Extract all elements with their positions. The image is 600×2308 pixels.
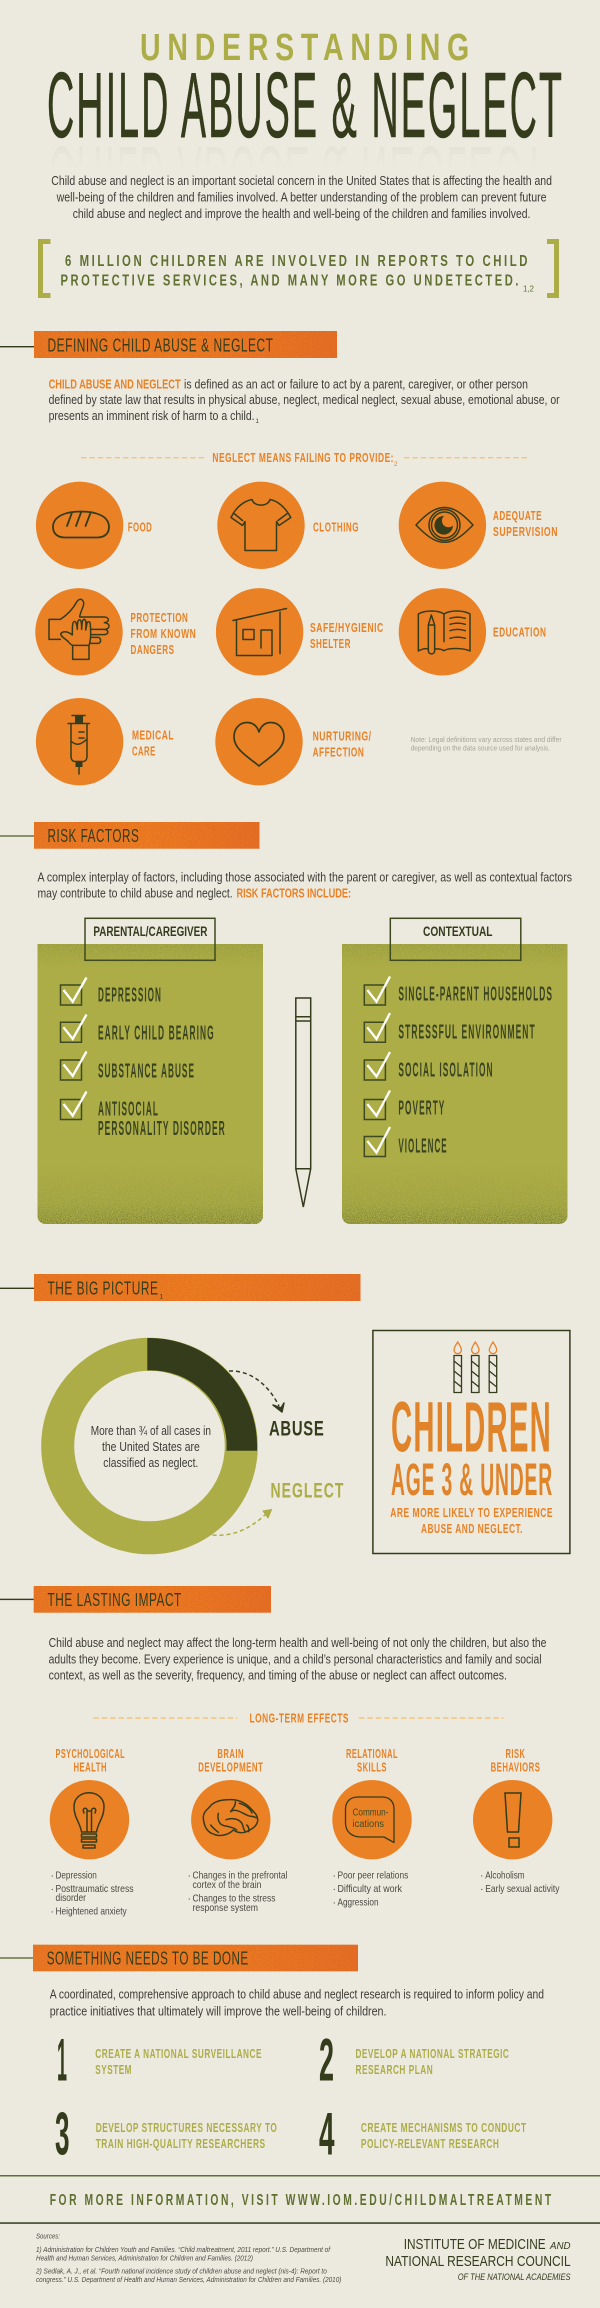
step 3: DEVELOP STRUCTURES NECESSARY TO [96,2120,277,2135]
step 1: 1 [57,2027,67,2094]
list: psychological: Posttraumatic stress [56,1883,134,1895]
column: brain development [188,1746,287,1914]
label: neglect: NEGLECT [270,1480,344,1503]
step 1: CREATE A NATIONAL SURVEILLANCE [95,2046,262,2061]
heading: long-term effects: LONG-TERM EFFECTS [250,1710,349,1725]
list: brain [188,1870,287,1914]
icon: light bulb [50,1780,129,1859]
list: brain: · [188,1870,191,1882]
list: psychological: · [50,1870,54,1882]
column: risk behaviors: RISK [506,1746,525,1761]
label: safe/hygienic shelter: SAFE/HYGIENIC [310,620,384,635]
section heading: risk factors [0,822,260,849]
donut center text: More than ¾ of all cases in [91,1424,211,1438]
sources: Health and Human Services, Administration for Children and Families. (2012) [36,2253,253,2262]
note: depending on the data source used for analysis. [411,744,550,753]
label: food: FOOD [128,519,152,534]
icon: candles [454,1342,497,1392]
step 1 [57,2027,262,2094]
step 3 [55,2101,277,2168]
section heading: defining [0,331,337,358]
label: protection from known dangers: FROM KNOWN [130,626,196,641]
icon: brain [191,1780,270,1859]
list: brain: · [188,1893,191,1905]
logo: institute of medicine: INSTITUTE OF MEDICINE [404,2236,546,2253]
icon: pencil [296,998,311,1207]
panel: parental/caregiver: PERSONALITY DISORDER [98,1117,226,1140]
intro text [51,173,552,221]
tab: parental/caregiver [85,918,215,960]
icon: education book [399,588,486,676]
checklist: parental/caregiver: DEPRESSION [98,984,162,1007]
list: psychological [50,1870,134,1918]
column: brain development: BRAIN [217,1746,244,1761]
panel: children age 3 and under [373,1330,570,1554]
text: more likely: ABUSE AND NEGLECT. [421,1521,523,1536]
label: safe/hygienic shelter [310,620,384,651]
checklist: parental/caregiver: ANTISOCIAL [98,1097,159,1120]
label: medical care: CARE [132,743,156,758]
list: risk: Alcoholism [485,1870,525,1882]
icon: food [36,482,123,569]
section heading: something needs to be done: SOMETHING NEEDS TO BE DONE [47,1947,249,1968]
list: relational: Poor peer relations [338,1870,408,1882]
heading: neglect means failing to provide: 2 [394,462,398,468]
label: medical care: MEDICAL [132,727,174,742]
icon: nurturing heart [215,698,303,785]
icon: speech bubble: Commun- [352,1808,388,1819]
sources: Sources: [36,2232,60,2241]
section heading: lasting impact [0,1586,271,1613]
title: UNDERSTANDING [140,27,476,69]
donut center text [91,1424,211,1470]
label: safe/hygienic shelter: SHELTER [310,636,351,651]
step 2: 2 [319,2027,334,2094]
section heading: something needs to be done [0,1945,358,1971]
list: psychological: Depression [56,1870,97,1882]
column: psychological health: HEALTH [74,1759,107,1774]
definition text: is defined as an act or failure to act by a parent, caregiver, or other person [184,376,528,391]
tab: contextual [390,918,521,960]
section heading: the big picture: THE BIG PICTURE [48,1277,158,1298]
note: Note: Legal definitions vary across states and differ [411,735,562,744]
tab: contextual: CONTEXTUAL [423,924,492,939]
section heading: the big picture: 1 [160,1294,164,1300]
step 2 [319,2027,509,2094]
logo: institute of medicine [385,2236,571,2283]
definition text: presents an imminent risk of harm to a child. [49,408,255,423]
definition text: 1 [256,419,260,425]
callout: 6 million children: 1,2 [523,285,535,294]
column: relational skills [332,1746,412,1909]
icon: speech bubble: ications [352,1819,384,1830]
list: psychological: disorder [56,1892,86,1904]
column: risk behaviors: BEHAVIORS [491,1759,540,1774]
list: relational: Aggression [338,1897,379,1909]
risk factors intro [38,870,572,901]
sources: 1) Administration for Children Youth and Families. “Child maltreatment, 2011 report.” U.S. Department of [36,2245,331,2254]
list: psychological: Heightened anxiety [56,1906,127,1918]
donut chart [58,1338,257,1538]
label: adequate supervision: SUPERVISION [493,524,558,539]
label: adequate supervision [493,508,558,539]
icon: speech bubble [332,1780,412,1859]
icon: shelter [216,588,303,676]
list: relational: Difficulty at work [338,1883,403,1895]
logo: institute of medicine: OF THE NATIONAL ACADEMIES [458,2272,571,2283]
heading: neglect means failing to provide: NEGLECT MEANS FAILING TO PROVIDE: [212,450,394,465]
section heading: risk factors: RISK FACTORS [48,825,139,846]
panel: parental/caregiver [38,918,263,1224]
section heading: the big picture [0,1274,360,1301]
column: brain development: DEVELOPMENT [198,1759,263,1774]
something needs to be done text: practice initiatives that ultimately will improve the well-being of children. [50,2003,386,2018]
icon: exclamation mark [473,1780,552,1859]
list: brain: Changes to the stress [192,1893,276,1905]
column: relational skills: SKILLS [357,1759,387,1774]
list: relational: · [332,1870,336,1882]
list: risk: · [480,1870,484,1882]
checklist: contextual: POVERTY [398,1096,445,1119]
column: psychological health: PSYCHOLOGICAL [56,1746,125,1761]
column: relational skills: RELATIONAL [346,1746,398,1761]
donut center text: classified as neglect. [103,1456,198,1470]
checklist: contextual [364,976,553,1157]
tab: parental/caregiver: PARENTAL/CAREGIVER [93,924,208,939]
list: psychological: · [50,1906,54,1918]
risk factors intro: RISK FACTORS INCLUDE: [236,886,351,901]
column: risk behaviors [473,1746,560,1895]
step 4 [319,2101,527,2168]
icon: supervision [399,482,486,569]
list: brain: Changes in the prefrontal [192,1870,287,1882]
section heading: defining: DEFINING CHILD ABUSE & NEGLECT [48,335,274,356]
label: nurturing/affection: NURTURING/ [313,728,372,743]
checklist: parental/caregiver [60,978,226,1140]
step 4: 4 [319,2101,335,2168]
list: relational [332,1870,408,1909]
icon: protection hands [35,588,123,676]
list: risk: · [480,1883,484,1895]
list: brain: cortex of the brain [192,1879,262,1891]
something needs to be done text [50,1987,544,2018]
list: risk: Early sexual activity [485,1883,560,1895]
lasting impact text [49,1635,546,1682]
label: clothing: CLOTHING [313,519,359,534]
checklist: parental/caregiver: SUBSTANCE ABUSE [98,1059,195,1082]
sources: 2) Sedlak, A. J., et al. “Fourth national incidence study of children abuse and neglect (nis-4): Report to [35,2267,327,2276]
step 2: RESEARCH PLAN [356,2062,433,2077]
checklist: contextual: VIOLENCE [398,1134,448,1157]
list: relational: · [332,1883,336,1895]
panel: contextual [342,918,568,1224]
definition text [49,376,560,425]
list: psychological: · [50,1883,54,1895]
heading: neglect means failing to provide [81,450,529,468]
label: protection from known dangers: PROTECTION [130,610,188,625]
icon: clothing [217,482,305,569]
list: relational: · [332,1897,336,1909]
text: more likely [390,1505,553,1536]
lasting impact text: context, as well as the severity, frequency, and timing of the abuse or neglect can affect outcomes. [49,1667,507,1682]
logo: institute of medicine: AND [549,2241,571,2252]
definition text: CHILD ABUSE AND NEGLECT [49,376,181,391]
label: abuse: ABUSE [269,1418,324,1441]
arrow: neglect [212,1510,272,1535]
label: protection from known dangers: DANGERS [130,642,174,657]
list: risk [480,1870,560,1895]
risk factors intro: may contribute to child abuse and neglect. [38,886,233,901]
label: protection from known dangers [130,610,196,657]
note [411,735,562,753]
label: adequate supervision: ADEQUATE [493,508,542,523]
callout: 6 million children [40,242,556,296]
icon: medical syringe [36,698,123,785]
label: medical care [132,727,174,758]
arrow: abuse [229,1371,284,1412]
label: nurturing/affection: AFFECTION [313,744,364,759]
step 2: DEVELOP A NATIONAL STRATEGIC [356,2046,509,2061]
list: brain: response system [192,1902,258,1914]
section heading: lasting impact: THE LASTING IMPACT [48,1589,182,1610]
label: education: EDUCATION [493,625,546,640]
panel: parental/caregiver: EARLY CHILD BEARING [98,1021,215,1044]
donut center text: the United States are [102,1440,200,1454]
step 3: TRAIN HIGH-QUALITY RESEARCHERS [96,2136,266,2151]
step 1: SYSTEM [95,2062,132,2077]
column: psychological health [50,1746,134,1918]
sources [35,2232,342,2284]
step 3: 3 [55,2101,70,2168]
sources: congress.” U.S. Department of Health and Human Services, Administration for Children and Families. (2010) [36,2275,342,2284]
step 4: POLICY-RELEVANT RESEARCH [361,2136,499,2151]
label: nurturing/affection [313,728,372,759]
